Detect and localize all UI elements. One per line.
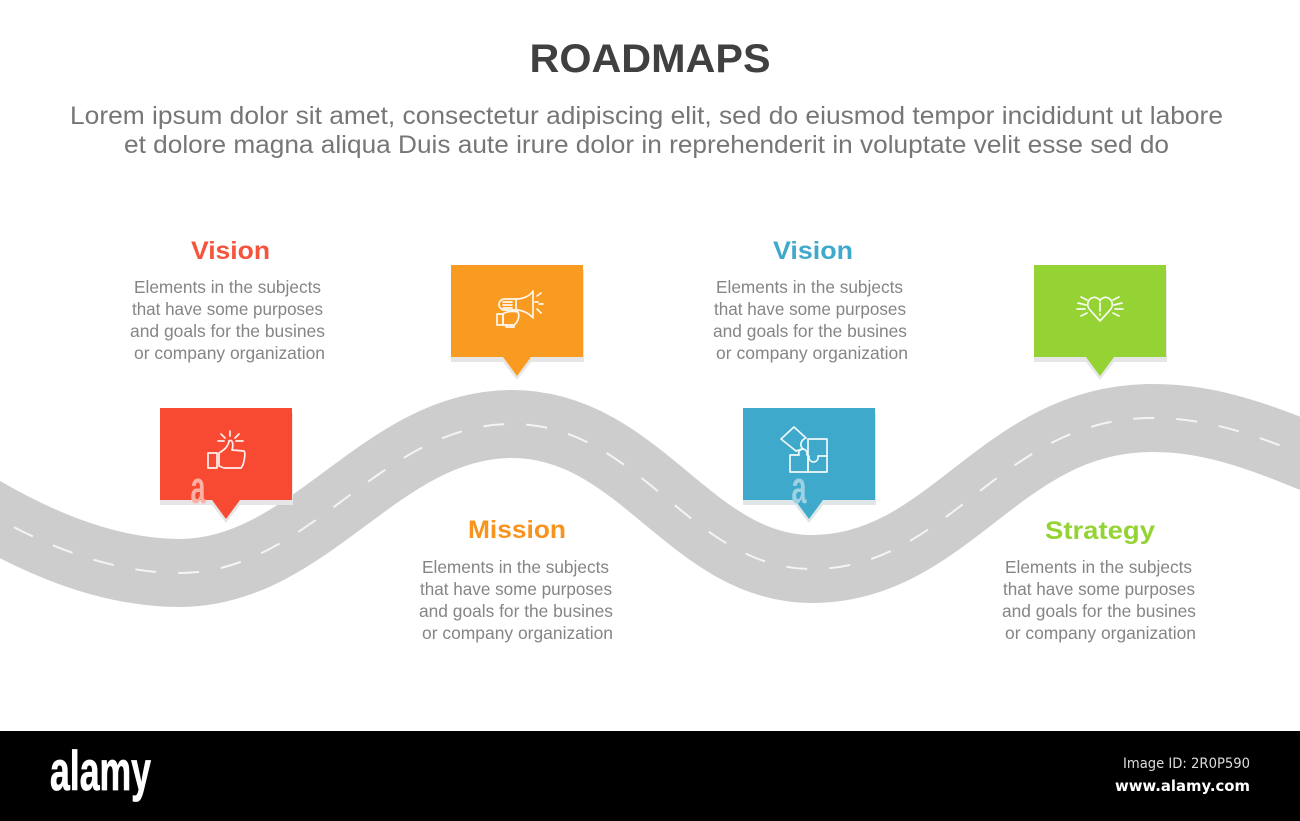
description: Mission: Elements in the subjects xyxy=(422,557,609,577)
description: Mission: that have some purposes xyxy=(420,579,612,599)
footer image id: Image ID: 2R0P590 xyxy=(1123,756,1250,772)
footer logo: alamy xyxy=(50,739,151,802)
description: Strategy: or company organization xyxy=(1005,623,1196,643)
subtitle text block: et dolore magna aliqua Duis aute irure dolor in reprehenderit in voluptate velit esse sed do xyxy=(124,131,1169,159)
heading: Mission: Mission xyxy=(468,516,566,544)
description: Strategy: Elements in the subjects xyxy=(1005,557,1192,577)
description: Vision blue: that have some purposes xyxy=(714,299,906,319)
description: Strategy xyxy=(1002,557,1196,643)
panel: red callout with thumbs-up icon: a xyxy=(190,462,206,513)
panel: orange callout with megaphone icon xyxy=(451,265,584,380)
panel: blue callout with puzzle icon xyxy=(743,408,876,523)
description: Vision red: Elements in the subjects xyxy=(134,277,321,297)
icon: megaphone xyxy=(497,291,543,327)
heading: Strategy: Strategy xyxy=(1045,517,1155,545)
description: Mission: or company organization xyxy=(422,623,613,643)
panel: red callout with thumbs-up icon xyxy=(160,408,293,523)
description: Vision red: and goals for the busines xyxy=(130,321,325,341)
footer bar xyxy=(0,731,1300,821)
text block: Strategy xyxy=(1002,517,1196,643)
description: Vision blue: and goals for the busines xyxy=(713,321,907,341)
panel: green callout with heart icon xyxy=(1034,265,1167,380)
description: Vision red: that have some purposes xyxy=(132,299,323,319)
description: Vision blue: Elements in the subjects xyxy=(716,277,903,297)
text block: blue Vision xyxy=(713,237,908,363)
panel: blue callout with puzzle icon: a xyxy=(792,462,807,513)
icon: puzzle pieces xyxy=(781,427,827,472)
footer url: www.alamy.com xyxy=(1115,777,1250,795)
text block: red Vision xyxy=(130,237,325,363)
subtitle text block: Lorem ipsum dolor sit amet, consectetur adipiscing elit, sed do eiusmod tempor incididunt ut labore xyxy=(70,102,1223,130)
heading: Vision blue: Vision xyxy=(773,237,853,265)
description: Strategy: and goals for the busines xyxy=(1002,601,1196,621)
description: Mission xyxy=(419,557,613,643)
subtitle text block xyxy=(70,102,1223,159)
icon: thumbs up xyxy=(208,431,245,468)
description: Vision blue: or company organization xyxy=(716,343,908,363)
description: Strategy: that have some purposes xyxy=(1003,579,1195,599)
description: Vision red: or company organization xyxy=(134,343,325,363)
title: ROADMAPS xyxy=(530,37,770,81)
description: Vision red xyxy=(130,277,325,363)
icon: heart with alert rays xyxy=(1077,297,1123,321)
text block: Mission xyxy=(419,516,613,643)
heading: Vision red: Vision xyxy=(191,237,270,265)
description: Mission: and goals for the busines xyxy=(419,601,613,621)
winding road xyxy=(0,418,1300,573)
description: Vision blue xyxy=(713,277,908,363)
